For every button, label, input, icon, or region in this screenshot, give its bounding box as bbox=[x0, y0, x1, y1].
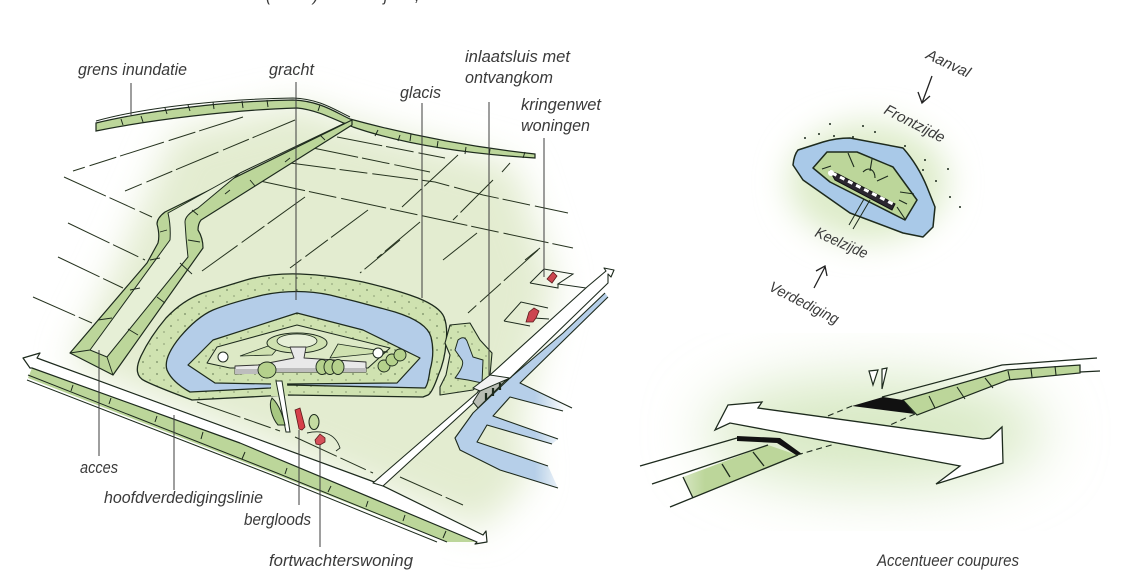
labels: grens inundatie bbox=[78, 60, 187, 79]
panel: fort orientation diagram bbox=[766, 46, 974, 328]
road to inlet bbox=[373, 268, 614, 486]
labels: acces bbox=[80, 458, 118, 477]
label: Verdediging: Verdediging bbox=[766, 278, 842, 328]
labels: hoofdverdedigingslinie bbox=[104, 488, 263, 507]
field lines bbox=[33, 117, 573, 505]
label: Aanval: Aanval bbox=[922, 46, 974, 82]
icon: fortwachterswoning bbox=[315, 434, 325, 445]
upper right dyke bbox=[852, 358, 1100, 415]
lower left dyke bbox=[640, 436, 802, 507]
arrow: aanval bbox=[918, 76, 932, 103]
entry road bbox=[849, 199, 870, 229]
labels: fortwachterswoning bbox=[269, 551, 414, 570]
inlet pond area bbox=[440, 323, 492, 395]
trees on island bbox=[258, 349, 406, 378]
inlet sluice bridge bbox=[473, 375, 510, 408]
island bbox=[813, 152, 917, 220]
arrow: verdediging bbox=[814, 266, 827, 288]
labels: gracht bbox=[269, 60, 315, 79]
icon: berg loods bbox=[295, 408, 305, 430]
green glow bbox=[705, 377, 1045, 487]
main road with double arrow: hoofdverdedigingslinie bbox=[23, 353, 487, 544]
icon: accent marks bbox=[869, 368, 887, 389]
dyke below road bbox=[28, 368, 477, 542]
dyke: inundation boundary bbox=[96, 98, 535, 158]
label: Frontzijde: Frontzijde bbox=[881, 101, 948, 147]
labels: woningen bbox=[521, 116, 590, 135]
labels: glacis bbox=[400, 83, 441, 102]
caption: Accentueer coupures bbox=[876, 551, 1019, 570]
glacis bbox=[137, 274, 447, 400]
fort building bbox=[830, 171, 895, 210]
panel: main fort landscape bbox=[23, 47, 614, 570]
leader lines bbox=[99, 82, 544, 547]
fort island bbox=[188, 313, 420, 384]
labels: ontvangkom bbox=[465, 68, 553, 87]
labels: inlaatsluis met bbox=[465, 47, 571, 66]
fort building bbox=[235, 347, 366, 374]
label: Keelzijde: Keelzijde bbox=[812, 224, 870, 262]
white arrow bbox=[715, 402, 1003, 484]
icon: kringenwet woningen bbox=[504, 269, 586, 326]
moat bbox=[793, 138, 935, 237]
glacis dots bbox=[804, 123, 961, 208]
labels: kringenwet bbox=[521, 95, 602, 114]
canal bbox=[455, 293, 608, 488]
labels: bergloods bbox=[244, 510, 311, 529]
dyke: acces bbox=[70, 120, 352, 375]
labels bbox=[78, 47, 602, 570]
moat: gracht bbox=[166, 292, 433, 392]
panel: accentueer coupures diagram bbox=[640, 358, 1100, 570]
dashed coupure lines bbox=[797, 406, 915, 455]
green glow bbox=[788, 122, 948, 242]
landscape background bbox=[70, 104, 555, 530]
entry road with tree bbox=[270, 381, 340, 451]
